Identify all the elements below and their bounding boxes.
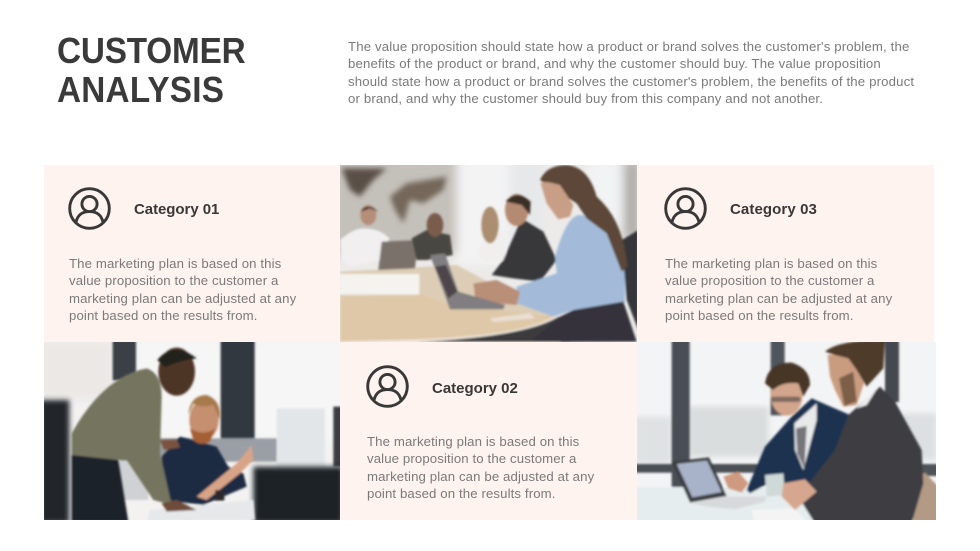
panel: category 03 — [637, 165, 934, 342]
intro text block: benefits of the product or brand, and why the customer should buy. The value proposition — [348, 56, 881, 71]
text block: marketing plan can be adjusted at any — [367, 469, 594, 484]
text block: point based on the results from. — [367, 486, 556, 501]
intro text block — [348, 39, 914, 106]
heading: Category 02 — [432, 380, 518, 397]
title: ANALYSIS — [57, 69, 224, 110]
text block: point based on the results from. — [665, 308, 854, 323]
panel: category 02 — [340, 342, 637, 520]
icon: user — [68, 187, 111, 230]
panel: category 01 — [44, 165, 340, 342]
blurred colleagues — [340, 228, 389, 267]
text block — [665, 256, 892, 323]
text block: The marketing plan is based on this — [367, 434, 579, 449]
text block: value proposition to the customer a — [665, 273, 874, 288]
photo: two businessmen with laptop — [637, 342, 936, 520]
text block: point based on the results from. — [69, 308, 258, 323]
text block — [69, 256, 296, 323]
text block: value proposition to the customer a — [367, 451, 576, 466]
icon: user — [366, 365, 409, 408]
intro text block: or brand, and why the customer should buy from this company and not another. — [348, 91, 823, 106]
title: CUSTOMER — [57, 30, 245, 71]
photo: two colleagues laughing — [44, 342, 340, 520]
photo: team at conference table — [340, 165, 637, 342]
woman and laptop — [517, 215, 625, 317]
text block: The marketing plan is based on this — [69, 256, 281, 271]
text block — [367, 434, 594, 501]
heading: Category 03 — [730, 201, 817, 218]
intro text block: The value proposition should state how a product or brand solves the customer's problem, the — [348, 39, 909, 54]
text block: value proposition to the customer a — [69, 273, 278, 288]
text block: marketing plan can be adjusted at any — [69, 291, 296, 306]
heading: Category 01 — [134, 201, 219, 218]
icon: user — [664, 187, 707, 230]
text block: The marketing plan is based on this — [665, 256, 877, 271]
text block: marketing plan can be adjusted at any — [665, 291, 892, 306]
title — [57, 30, 245, 110]
intro text block: should state how a product or brand solves the customer's problem, the benefits of the product — [348, 74, 914, 89]
